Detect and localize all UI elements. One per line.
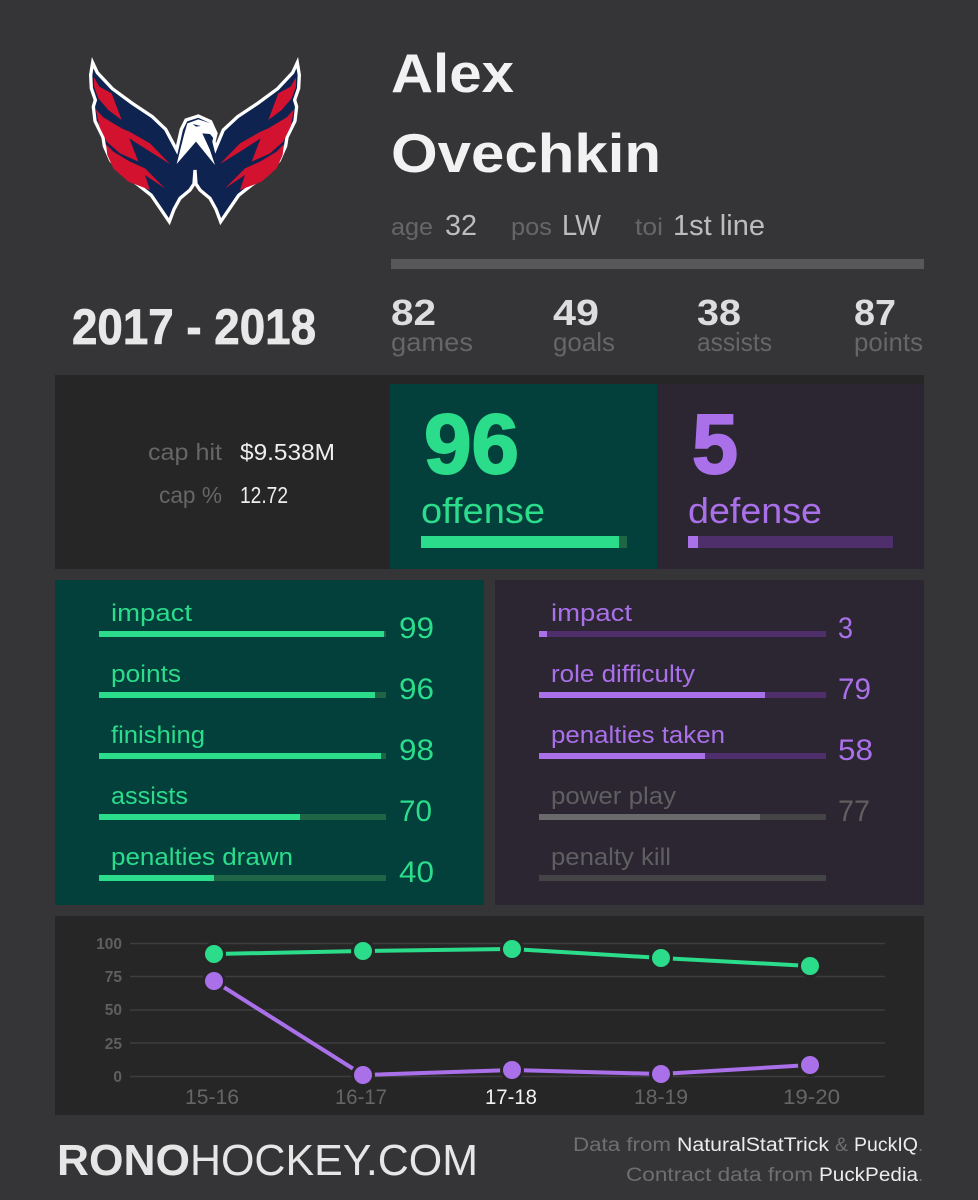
panel: offense breakdown bbox=[55, 580, 484, 905]
x axis labels bbox=[185, 1086, 840, 1109]
panel: defense breakdown: impact bbox=[551, 600, 632, 627]
footer credits: Data from bbox=[573, 1135, 671, 1156]
season stats: points bbox=[854, 327, 923, 357]
player details: 1st line bbox=[673, 210, 765, 242]
player details: LW bbox=[562, 210, 602, 242]
panel: defense breakdown: 79 bbox=[838, 673, 871, 706]
footer credits: . bbox=[918, 1165, 923, 1186]
y axis labels: 25 bbox=[105, 1036, 122, 1053]
panel: offense breakdown: 99 bbox=[399, 612, 434, 645]
footer brand bbox=[57, 1136, 478, 1185]
divider bar bbox=[391, 259, 924, 269]
footer credits: . bbox=[918, 1135, 923, 1156]
icon: team logo bbox=[91, 63, 299, 222]
footer brand: HOCKEY.COM bbox=[190, 1136, 478, 1185]
panel: offense rating: 96 bbox=[424, 397, 519, 491]
panel: defense rating: 5 bbox=[692, 397, 738, 491]
y axis labels: 100 bbox=[96, 936, 122, 953]
season stats: 87 bbox=[854, 292, 896, 333]
panel: defense breakdown: 3 bbox=[838, 612, 853, 645]
contract details: cap % bbox=[159, 482, 222, 508]
footer credits: PuckPedia bbox=[819, 1165, 918, 1186]
x axis labels: 19-20 bbox=[783, 1086, 840, 1109]
panel: defense breakdown: penalty kill bbox=[551, 844, 671, 871]
panel: offense breakdown: penalties drawn bbox=[111, 844, 293, 871]
panel: defense breakdown: 77 bbox=[838, 795, 870, 828]
footer credits bbox=[573, 1135, 923, 1186]
footer credits: NaturalStatTrick bbox=[677, 1135, 830, 1156]
season stats: goals bbox=[553, 327, 615, 357]
x axis labels: 16-17 bbox=[335, 1086, 387, 1109]
footer credits: Contract data from bbox=[626, 1165, 813, 1186]
player details: toi bbox=[635, 214, 663, 241]
season stats: 82 bbox=[391, 292, 436, 333]
title: player name: Alex bbox=[391, 42, 514, 104]
y axis labels: 75 bbox=[105, 969, 122, 986]
panel: defense breakdown: penalties taken bbox=[551, 722, 725, 749]
panel: defense breakdown: role difficulty bbox=[551, 661, 695, 688]
title: player name: Ovechkin bbox=[391, 122, 661, 184]
player details bbox=[391, 210, 765, 242]
panel: offense breakdown: 98 bbox=[399, 734, 434, 767]
y axis labels: 0 bbox=[113, 1069, 122, 1086]
x axis labels: 17-18 bbox=[485, 1086, 537, 1109]
footer credits: PuckIQ bbox=[854, 1135, 918, 1156]
logo red feathers left bbox=[94, 77, 296, 190]
panel: offense breakdown: 40 bbox=[399, 856, 434, 889]
player details: age bbox=[391, 214, 433, 241]
panel: offense breakdown: assists bbox=[111, 783, 188, 810]
season stats: assists bbox=[697, 327, 772, 357]
y axis labels bbox=[96, 936, 122, 1086]
contract details: $9.538M bbox=[240, 439, 335, 465]
panel: offense rating: offense bbox=[421, 490, 545, 531]
panel: offense rating bbox=[390, 384, 657, 569]
panel: defense rating bbox=[657, 384, 924, 569]
offense line bbox=[202, 937, 822, 978]
panel: defense breakdown: 58 bbox=[838, 734, 873, 767]
contract details bbox=[148, 439, 335, 508]
season stats bbox=[391, 292, 923, 357]
season stats: 38 bbox=[697, 292, 741, 333]
season heading: 2017 - 2018 bbox=[72, 299, 316, 355]
panel: defense breakdown: power play bbox=[551, 783, 676, 810]
x axis labels: 15-16 bbox=[185, 1086, 239, 1109]
contract details: 12.72 bbox=[240, 482, 288, 508]
panel: offense breakdown: 70 bbox=[399, 795, 432, 828]
panel: offense breakdown: impact bbox=[111, 600, 192, 627]
player details: pos bbox=[511, 214, 552, 241]
footer credits: & bbox=[835, 1135, 848, 1156]
season stats: games bbox=[391, 327, 473, 357]
player details: 32 bbox=[445, 210, 477, 242]
contract details: cap hit bbox=[148, 439, 223, 465]
footer brand: RONO bbox=[57, 1136, 190, 1185]
panel: defense rating: defense bbox=[688, 490, 822, 531]
panel: offense breakdown: 96 bbox=[399, 673, 434, 706]
panel: offense breakdown: finishing bbox=[111, 722, 205, 749]
panel: offense breakdown: points bbox=[111, 661, 181, 688]
logo eagle head bbox=[177, 119, 216, 165]
y axis labels: 50 bbox=[105, 1002, 122, 1019]
defense line bbox=[202, 969, 822, 1087]
season stats: 49 bbox=[553, 292, 599, 333]
panel: contract and ratings background bbox=[55, 375, 924, 569]
panel: defense breakdown bbox=[495, 580, 924, 905]
title: player name bbox=[391, 42, 661, 184]
x axis labels: 18-19 bbox=[634, 1086, 688, 1109]
chart: five season ratings bbox=[55, 916, 924, 1115]
